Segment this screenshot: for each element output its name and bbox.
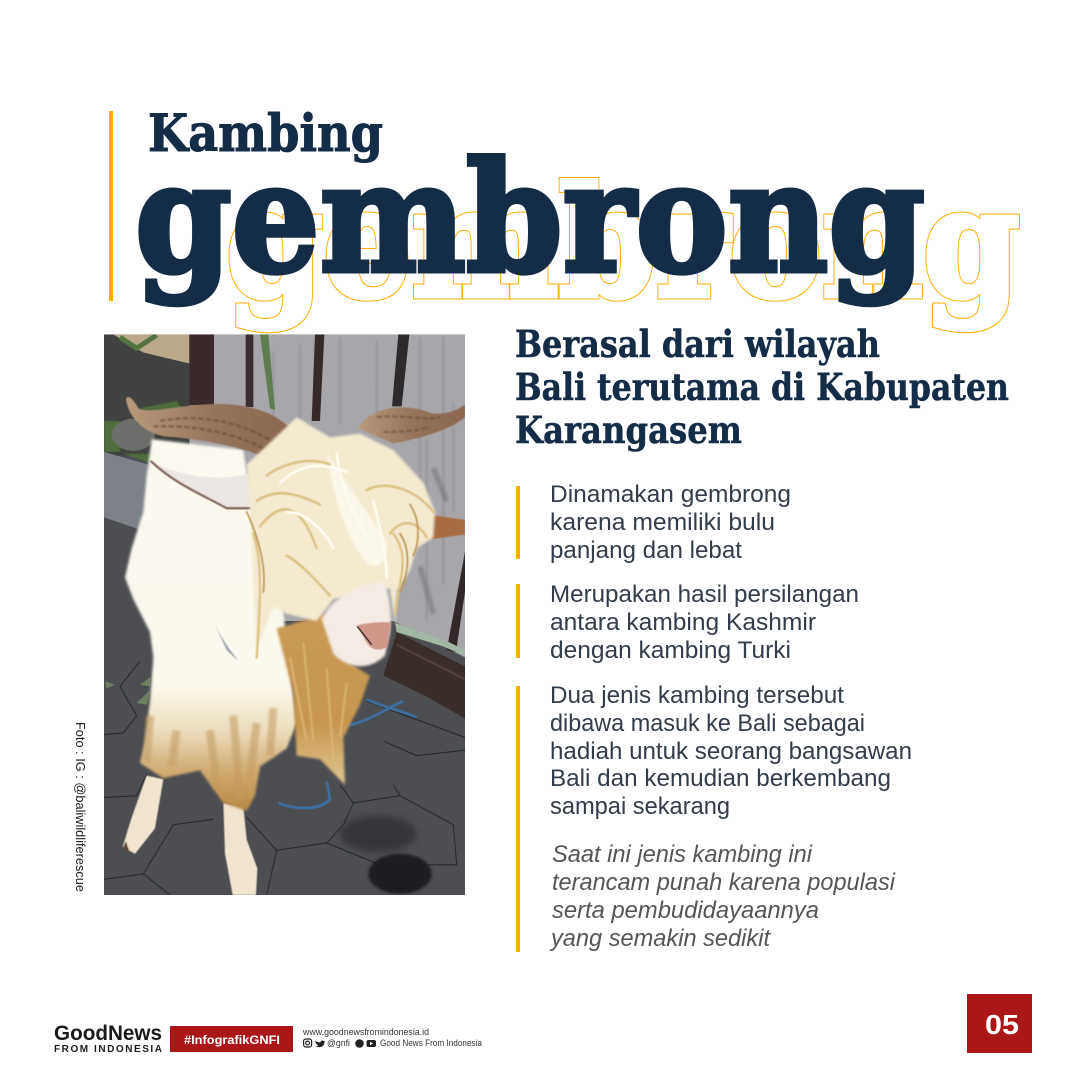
hashtag badge bbox=[170, 1026, 293, 1052]
footer logo: FROM INDONESIA bbox=[54, 1044, 162, 1055]
page name: Good News From Indonesia bbox=[380, 1038, 482, 1048]
footer contact links: www.goodnewsfromindonesia.id bbox=[302, 1027, 429, 1037]
subheading: Karangasem bbox=[515, 408, 742, 452]
closing note in italics: serta pembudidayaannya bbox=[552, 897, 819, 924]
icon: youtube bbox=[366, 1040, 376, 1047]
title accent bar bbox=[109, 111, 113, 301]
goat legs bbox=[123, 776, 257, 895]
fact 1: Dinamakan gembrong bbox=[550, 481, 791, 508]
fact 1: karena memiliki bulu bbox=[550, 509, 775, 536]
fact 3: dibawa masuk ke Bali sebagai bbox=[550, 710, 865, 737]
fact 3: hadiah untuk seorang bangsawan bbox=[550, 738, 912, 765]
closing note in italics: Saat ini jenis kambing ini bbox=[552, 841, 813, 868]
goat head hair bbox=[247, 417, 435, 650]
hashtag badge: #InfografikGNFI bbox=[184, 1033, 280, 1047]
handle: @gnfi bbox=[327, 1038, 350, 1048]
goat body fur bbox=[125, 439, 297, 811]
fact 3 and closing note accent bar bbox=[516, 686, 520, 952]
goat left horn bbox=[126, 396, 288, 455]
footer contact links bbox=[302, 1027, 482, 1048]
icon: facebook bbox=[355, 1039, 364, 1048]
fact 1: panjang dan lebat bbox=[550, 537, 742, 564]
icon: instagram bbox=[304, 1039, 312, 1047]
fact 2: Merupakan hasil persilangan bbox=[550, 581, 859, 608]
fact 3 bbox=[550, 682, 912, 820]
footer logo bbox=[54, 1022, 162, 1055]
closing note in italics: yang semakin sedikit bbox=[549, 925, 771, 952]
closing note in italics bbox=[549, 841, 896, 952]
page number badge bbox=[967, 994, 1032, 1053]
goat ears bbox=[151, 461, 465, 539]
goat snout bbox=[322, 581, 391, 666]
title: Kambing: Kambing bbox=[148, 104, 383, 164]
fact 2 bbox=[516, 581, 859, 664]
subheading: Bali terutama di Kabupaten bbox=[515, 365, 1009, 409]
goat nose bbox=[357, 622, 391, 650]
icon: twitter bbox=[315, 1040, 325, 1047]
title outline: gembrong: gembrong bbox=[226, 153, 1020, 332]
subheading: Berasal dari wilayah bbox=[515, 322, 880, 366]
photo credit: Foto : IG : @baliwildliferescue bbox=[73, 722, 88, 892]
page number badge: 05 bbox=[985, 1009, 1019, 1040]
photo: long-haired goat bbox=[104, 334, 465, 895]
title outline: gembrong: gembrong bbox=[226, 153, 1020, 332]
fact 1 bbox=[516, 481, 791, 564]
fact 3: sampai sekarang bbox=[550, 793, 730, 820]
footer logo: GoodNews bbox=[54, 1022, 162, 1045]
goat right horn bbox=[358, 405, 465, 444]
goat beard bbox=[277, 614, 370, 785]
subheading bbox=[515, 322, 1009, 452]
fact 2: antara kambing Kashmir bbox=[550, 609, 816, 636]
title: gembrong: gembrong bbox=[135, 128, 925, 307]
closing note in italics: terancam punah karena populasi bbox=[552, 869, 896, 896]
fact 3: Dua jenis kambing tersebut bbox=[550, 682, 844, 709]
infographic canvas bbox=[54, 111, 1032, 1053]
fact 3: Bali dan kemudian berkembang bbox=[550, 765, 891, 792]
fact 2: dengan kambing Turki bbox=[550, 637, 791, 664]
